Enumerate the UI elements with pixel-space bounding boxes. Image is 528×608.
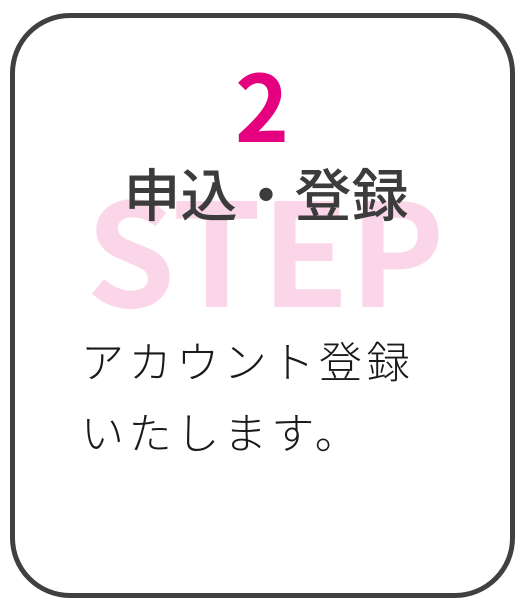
watermark: STEP: STEP — [86, 142, 445, 349]
heading: 申込・登録 — [124, 151, 408, 233]
step number: 2 — [235, 36, 289, 169]
description text: いたします。 — [81, 400, 362, 462]
description text: アカウント登録 — [81, 329, 414, 391]
description text — [81, 329, 414, 462]
